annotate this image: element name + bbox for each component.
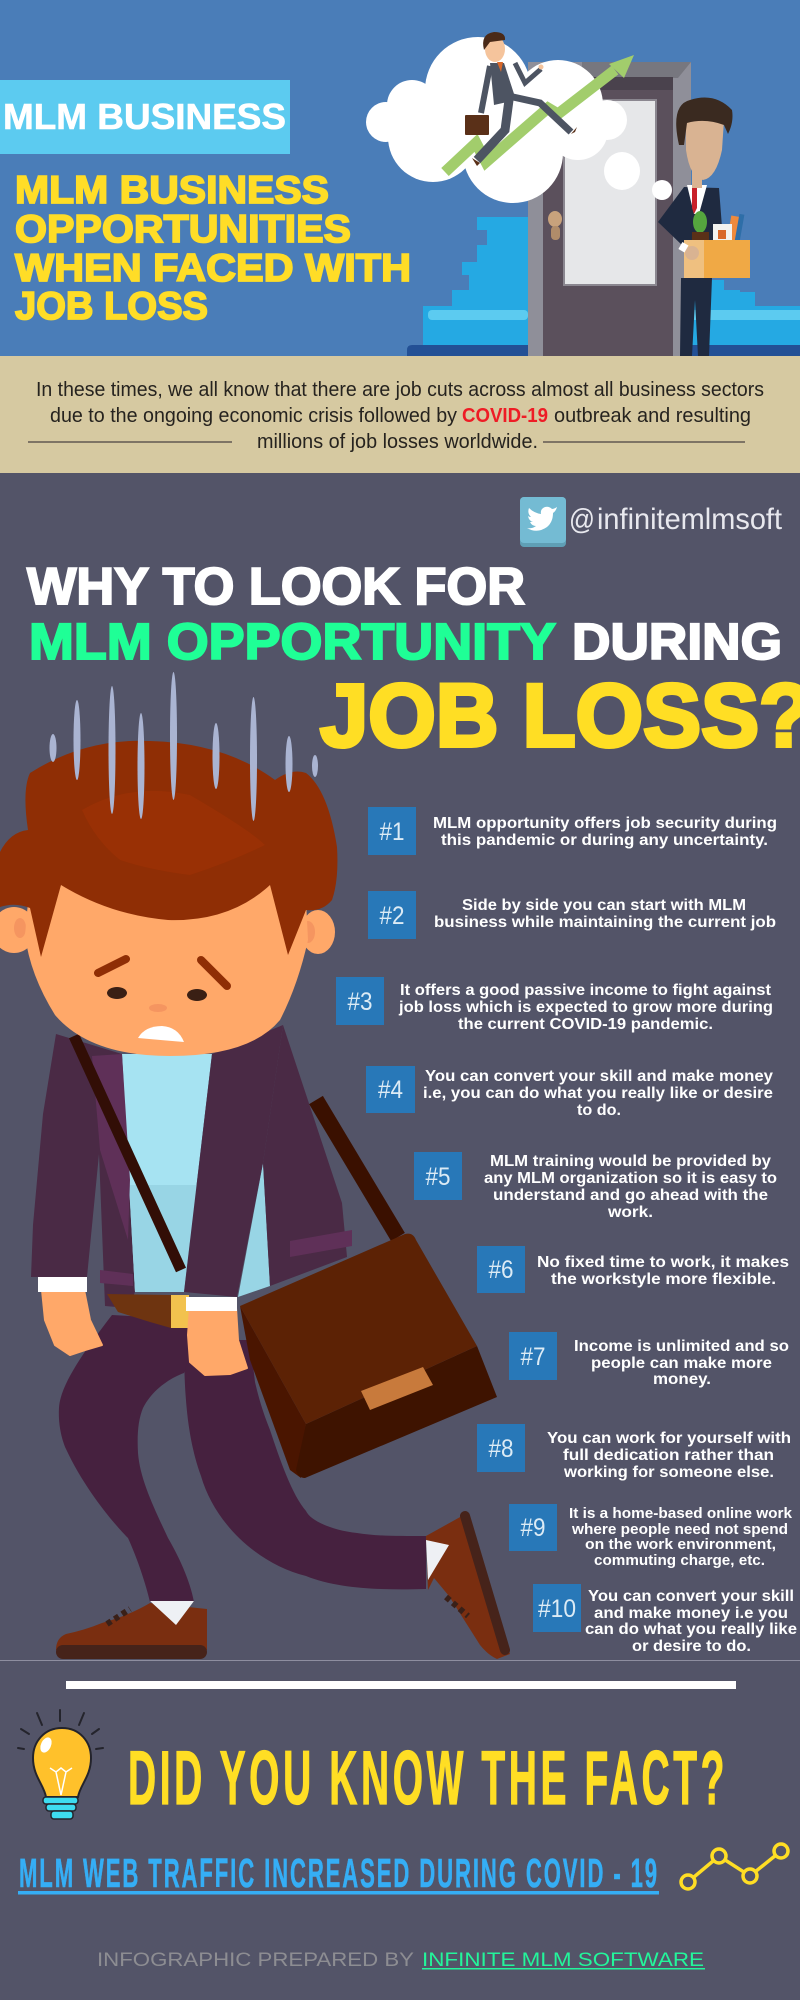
list: reason 6: #6 (488, 1256, 514, 1284)
icon: twitter handle (520, 497, 783, 547)
figure: sweat drops (50, 672, 318, 821)
list: reason 10: or desire to do. (632, 1638, 751, 1655)
list: reason 2: #2 (380, 902, 404, 930)
figure: right arm and jacket (184, 1025, 347, 1297)
text: intro paragraph: outbreak and resulting (554, 404, 751, 427)
list: reason 4: to do. (577, 1102, 621, 1119)
figure: back leg (184, 1340, 426, 1589)
icon: twitter handle: infinitemlmsoft (597, 503, 783, 536)
list: reason 8: full dedication rather than (563, 1447, 774, 1464)
list: reason 10: can do what you really like (585, 1621, 797, 1638)
list: reason 7 (509, 1332, 789, 1388)
list: reason 4: You can convert your skill and make money (425, 1068, 773, 1085)
footer credit: INFINITE MLM SOFTWARE (422, 1949, 704, 1971)
illustration: stairs and base (407, 217, 800, 356)
figure: face (25, 880, 308, 1056)
list: reason 9: #9 (520, 1514, 546, 1542)
icon: light bulb (18, 1710, 103, 1819)
list: reason 5: work. (607, 1204, 653, 1221)
list: reason 4: #4 (378, 1076, 403, 1104)
heading: hero title: JOB LOSS (15, 285, 208, 328)
illustration: door (528, 62, 691, 356)
figure: bag (240, 1234, 497, 1478)
list: reason 1: this pandemic or during any uncertainty. (441, 832, 768, 849)
list: reason 9: on the work environment, (585, 1536, 776, 1553)
list: reason 1: #1 (380, 818, 404, 846)
list: reason 7: Income is unlimited and so (574, 1338, 789, 1355)
list: reason 6 (477, 1246, 789, 1293)
illustration: sad man with bag (0, 672, 510, 1659)
heading: hero title: MLM BUSINESS (15, 169, 329, 212)
list: reason 10: and make money i.e you (594, 1605, 788, 1622)
list: reason 4 (366, 1066, 773, 1119)
list: reason 9: where people need not spend (571, 1521, 788, 1538)
icon: growth arrow (445, 55, 634, 172)
list: reason 3: job loss which is expected to grow more during (398, 999, 773, 1016)
heading: why to look for (27, 558, 800, 765)
figure: shirt (122, 1054, 270, 1297)
list: reason 5: MLM training would be provided by (490, 1153, 771, 1170)
figure: left shoe (56, 1601, 207, 1659)
panel: intro text (0, 356, 800, 473)
figure: jacket left (31, 1034, 135, 1308)
figure: eyebrows (98, 959, 227, 986)
footer credit: INFOGRAPHIC PREPARED BY (97, 1949, 414, 1971)
figure: hands and cuffs (38, 1277, 247, 1375)
list: reason 5: understand and go ahead with the (493, 1187, 768, 1204)
figure: sleeve tabs (100, 1230, 352, 1286)
list: reason 2 (368, 891, 776, 939)
list: reason 8: You can work for yourself with (547, 1430, 791, 1447)
list: reason 3: #3 (348, 988, 372, 1016)
list: reason 2: business while maintaining the current job (434, 914, 776, 931)
illustration: thought cloud (366, 37, 672, 203)
list: reason 3: It offers a good passive income to fight against (400, 982, 772, 999)
list: reason 7: #7 (520, 1343, 546, 1371)
text: intro paragraph: millions of job losses worldwide. (257, 430, 538, 453)
heading: why to look for: MLM OPPORTUNITY (29, 613, 556, 670)
list: reason 9: It is a home-based online work (569, 1505, 793, 1522)
heading: hero title: OPPORTUNITIES (15, 208, 351, 251)
list: reason 3 (336, 977, 773, 1033)
figure: belt (107, 1294, 189, 1328)
list: reason 9 (509, 1504, 793, 1569)
list: reason 1 (368, 807, 777, 855)
list: reason 5: any MLM organization so it is easy to (484, 1170, 777, 1187)
divider bar (66, 1681, 736, 1689)
list: reason 5 (414, 1152, 777, 1221)
list: reason 7: people can make more (591, 1355, 772, 1372)
list: reason 9: commuting charge, etc. (594, 1552, 765, 1569)
list: reason 8 (477, 1424, 791, 1481)
footer credit (97, 1949, 705, 1971)
icon: twitter handle: @ (569, 504, 595, 536)
figure: bag strap (74, 1036, 398, 1270)
text: intro paragraph: due to the ongoing economic crisis followed by (50, 404, 458, 427)
figure: front leg (59, 1315, 200, 1602)
list: reason 7: money. (653, 1371, 711, 1388)
list: reason 3: the current COVID-19 pandemic. (458, 1016, 713, 1033)
figure: ears (0, 907, 335, 954)
illustration: running businessman (465, 32, 577, 166)
label: MLM business banner: MLM BUSINESS (3, 96, 286, 137)
list: reason 10 (533, 1584, 797, 1655)
heading: why to look for: WHY TO LOOK FOR (27, 558, 525, 616)
figure: lapel (92, 1054, 130, 1240)
list: reason 10: #10 (538, 1595, 576, 1623)
label: MLM business banner (0, 80, 290, 154)
figure: hair (0, 741, 337, 957)
list: reason 2: Side by side you can start with MLM (462, 897, 746, 914)
text: intro paragraph: COVID-19 (462, 404, 548, 427)
panel: hero (0, 0, 800, 356)
list: reason 8: working for someone else. (563, 1464, 774, 1481)
figure: mouth (138, 1026, 184, 1042)
list: reason 4: i.e, you can do what you really like or desire (423, 1085, 773, 1102)
list: reason 6: the workstyle more flexible. (551, 1271, 776, 1288)
illustration: man with box (658, 98, 750, 356)
figure: right shoe (426, 1516, 510, 1659)
heading: why to look for: DURING (572, 613, 782, 670)
list: reason 8: #8 (488, 1435, 514, 1463)
list: reason 6: No fixed time to work, it makes (537, 1254, 789, 1271)
list: reason 5: #5 (426, 1163, 450, 1191)
heading: hero title (15, 169, 411, 328)
text: intro paragraph (36, 378, 764, 453)
list: reason 1: MLM opportunity offers job security during (433, 815, 777, 832)
list: reason 10: You can convert your skill (588, 1588, 794, 1605)
text: intro paragraph: In these times, we all know that there are job cuts across almost all business sectors (36, 378, 764, 401)
figure: eyes and nose (107, 987, 207, 1012)
icon: line chart (681, 1844, 788, 1889)
heading: hero title: WHEN FACED WITH (15, 247, 411, 290)
